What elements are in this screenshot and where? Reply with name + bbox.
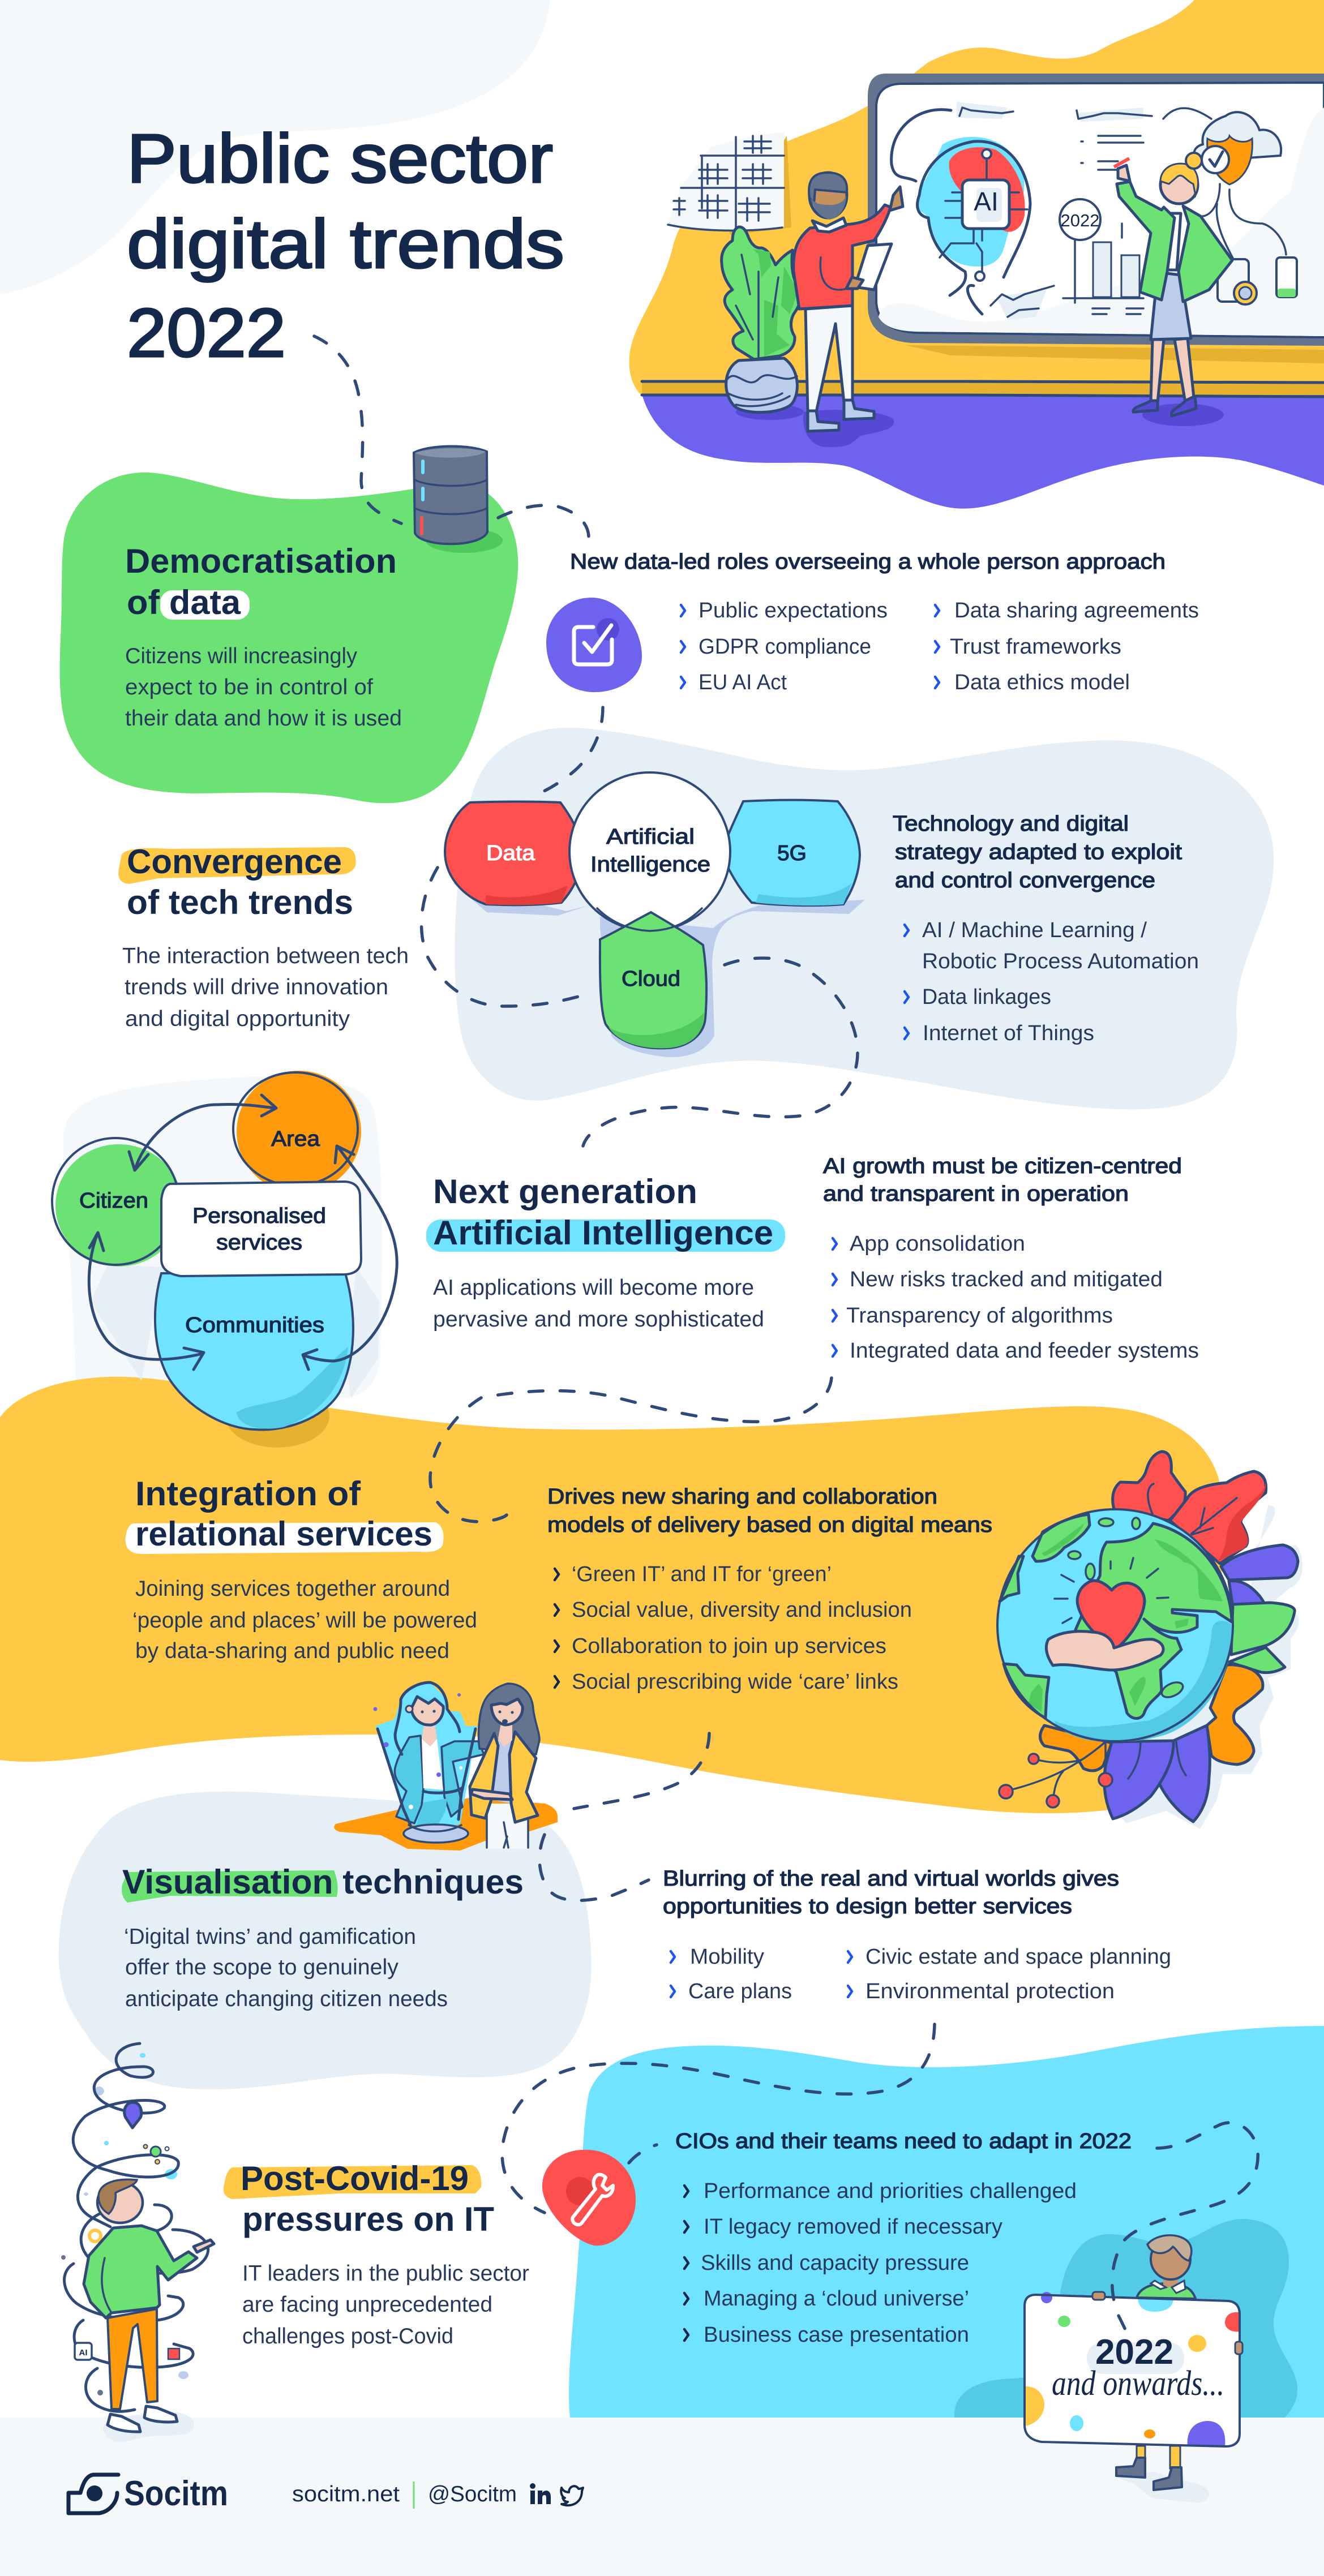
- node: communities: [155, 1273, 353, 1429]
- panel: personalised services blob: [63, 1076, 382, 1398]
- section: democratisation of data: [125, 542, 402, 731]
- man: [794, 173, 903, 431]
- section: new data-led roles: [546, 550, 1199, 694]
- heading: Convergence: [127, 843, 342, 881]
- background blob: hero floor: [642, 394, 1324, 509]
- diagram: AI head: [892, 110, 1030, 314]
- diagram: notes and arrows: [957, 102, 1211, 320]
- leaf: purple: [1221, 1545, 1298, 1580]
- legs: [1137, 2446, 1180, 2468]
- body text: ‘people and places’ will be powered: [132, 1608, 477, 1633]
- hands: [1092, 2292, 1242, 2354]
- section: blurring real and virtual: [663, 1867, 1171, 2003]
- footer: handle: @Socitm: [428, 2482, 517, 2506]
- section: next generation AI: [426, 1173, 785, 1332]
- body text: [242, 2261, 529, 2349]
- title: 2022: [127, 294, 286, 371]
- node: 5G: 5G: [777, 842, 807, 865]
- list: right column: Data ethics model: [954, 671, 1130, 694]
- trousers: [108, 2309, 157, 2409]
- node: artificial intelligence: Intelligence: [590, 853, 710, 877]
- body text: expect to be in control of: [125, 675, 373, 699]
- sign text: and onwards: and onwards...: [1052, 2364, 1224, 2403]
- list: right: Environmental protection: [865, 1980, 1115, 2003]
- subheading: AI growth must be citizen-centred: [823, 1154, 1182, 1178]
- label: 2022: 2022: [1061, 211, 1099, 230]
- node: 5G: [722, 800, 860, 905]
- body text: [125, 644, 402, 731]
- list: left: Mobility: [690, 1945, 764, 1969]
- node: personalised services: services: [216, 1231, 302, 1255]
- list: right: Civic estate and space planning: [865, 1945, 1171, 1969]
- skirting: [642, 381, 1324, 397]
- arrows: [89, 1095, 397, 1369]
- icon: AI chip: AI: [79, 2348, 87, 2358]
- footer panel: [0, 2418, 1324, 2576]
- icon: twitter: [561, 2486, 583, 2505]
- digital twin: [374, 1682, 484, 1843]
- highlight: convergence: [118, 847, 356, 884]
- subheading: strategy adapted to exploit: [895, 840, 1182, 864]
- highlight: relational services: [126, 1522, 444, 1554]
- heading line two: of tech trends: [127, 883, 353, 921]
- panel: post-covid darker blob: [954, 2219, 1297, 2418]
- list: Skills and capacity pressure: [701, 2251, 969, 2275]
- icon: wrench: [542, 2150, 636, 2246]
- node: area: [233, 1071, 361, 1193]
- shadow: [225, 1384, 329, 1448]
- section: integration of relational services: [126, 1475, 477, 1663]
- shoes: [108, 2406, 177, 2432]
- puddle: [334, 1798, 558, 1851]
- subheading: Technology and digital: [893, 812, 1129, 836]
- sign: [1023, 2292, 1241, 2446]
- body text: anticipate changing citizen needs: [125, 1987, 448, 2011]
- body text: trends will drive innovation: [125, 975, 388, 999]
- leaf: red back: [1113, 1452, 1185, 1521]
- background blob: top left: [0, 0, 550, 294]
- leaf: green: [1231, 1603, 1295, 1655]
- list: [905, 918, 1199, 1045]
- body text: [433, 1276, 764, 1332]
- title: [127, 120, 564, 371]
- section: drives new sharing: [547, 1485, 992, 1694]
- woman: [470, 1684, 539, 1849]
- list: Transparency of algorithms: [846, 1304, 1113, 1328]
- list: Robotic Process Automation: [922, 950, 1199, 973]
- list: [555, 1562, 912, 1694]
- body text: are facing unprecedented: [242, 2292, 492, 2317]
- body text: Citizens will increasingly: [125, 644, 357, 668]
- section: AI growth: [823, 1154, 1199, 1363]
- leaf shadows: [1109, 1505, 1302, 1829]
- list: New risks tracked and mitigated: [850, 1268, 1163, 1291]
- icon: database: [414, 446, 503, 553]
- node: data: Data: [486, 842, 535, 865]
- whiteboard: [868, 74, 1324, 363]
- list: left column: [681, 599, 888, 694]
- node: personalised services: Personalised: [192, 1204, 326, 1228]
- list: right column: Data sharing agreements: [954, 599, 1199, 622]
- illustration: man surrounded by spirals: [61, 2043, 214, 2442]
- dashed connector: final: [1112, 2123, 1258, 2334]
- floor shadows: [736, 403, 1224, 447]
- footer: divider: [413, 2481, 414, 2509]
- diagram: personalised services: [52, 1071, 397, 1448]
- list: left column: EU AI Act: [699, 671, 787, 694]
- subheading: Blurring of the real and virtual worlds gives: [663, 1867, 1119, 1891]
- list: left: Care plans: [688, 1980, 792, 2003]
- node: communities: Communities: [185, 1313, 324, 1337]
- pot: [726, 358, 797, 413]
- head: [97, 2179, 143, 2223]
- body text: challenges post-Covid: [242, 2324, 453, 2349]
- list: left column: GDPR compliance: [699, 635, 871, 659]
- subheading: New data-led roles overseeing a whole person approach: [570, 550, 1166, 574]
- list: Social prescribing wide ‘care’ links: [572, 1670, 898, 1694]
- list: AI / Machine Learning /: [922, 918, 1147, 942]
- footer: logo: Socitm: [124, 2474, 228, 2513]
- body text: pervasive and more sophisticated: [433, 1307, 764, 1332]
- section: post-covid pressures: [224, 2159, 529, 2349]
- shade: [91, 1265, 379, 1398]
- illustration: globe with heart and leaves: [997, 1452, 1302, 1829]
- title: Public sector: [127, 120, 553, 197]
- heart rays: [1055, 1558, 1168, 1623]
- node: personalised services: [161, 1182, 361, 1276]
- icon: AI chip: [75, 2343, 92, 2360]
- list: Collaboration to join up services: [572, 1634, 886, 1658]
- subheading: models of delivery based on digital means: [547, 1513, 992, 1537]
- plant: [722, 227, 801, 359]
- highlight: visualisation: [122, 1870, 338, 1903]
- sign text: 2022: 2022: [1095, 2333, 1173, 2372]
- body text: ‘Digital twins’ and gamification: [124, 1925, 416, 1949]
- heading: Post-Covid-19: [241, 2159, 469, 2197]
- body text: their data and how it is used: [125, 706, 402, 731]
- list: Performance and priorities challenged: [704, 2179, 1077, 2203]
- spirals: [65, 2043, 208, 2411]
- subheading: [547, 1485, 992, 1537]
- list: right column: Trust frameworks: [950, 635, 1121, 659]
- dots: [61, 2053, 188, 2395]
- body text: AI applications will become more: [433, 1276, 754, 1300]
- background blob: hero wall: [629, 0, 1324, 396]
- list: Integrated data and feeder systems: [850, 1339, 1199, 1363]
- sweater: [84, 2226, 197, 2318]
- list: right column: [935, 599, 1199, 694]
- body text: IT leaders in the public sector: [242, 2261, 529, 2286]
- hand: [1046, 1632, 1163, 1670]
- body text: [132, 1577, 477, 1663]
- section: CIOs adapt: [675, 2130, 1132, 2347]
- icon: heart: [1077, 1581, 1145, 1651]
- list: Data linkages: [922, 985, 1051, 1009]
- heading: Integration of: [135, 1475, 361, 1513]
- node: area: Area: [271, 1127, 320, 1151]
- heading line two: of data: [127, 583, 241, 621]
- list: App consolidation: [850, 1232, 1025, 1256]
- subheading: and control convergence: [895, 869, 1155, 892]
- body text: offer the scope to genuinely: [125, 1955, 399, 1980]
- panel: convergence blob: [455, 728, 1274, 1109]
- illustration: hero scene: [642, 74, 1324, 447]
- subheading: [823, 1154, 1182, 1206]
- body text: Joining services together around: [135, 1577, 450, 1601]
- list: [833, 1232, 1199, 1363]
- hand: [194, 2240, 214, 2252]
- subheading: opportunities to design better services: [663, 1895, 1072, 1918]
- highlight: post-covid: [224, 2165, 481, 2199]
- berries: [999, 1742, 1112, 1808]
- panel: post-covid blob: [569, 2026, 1324, 2418]
- woman: [1114, 153, 1232, 416]
- list: left column: Public expectations: [699, 599, 888, 622]
- icon: padlock: [168, 2349, 179, 2359]
- node: citizen: [52, 1138, 182, 1266]
- list: [684, 2179, 1077, 2347]
- heading line two: pressures on IT: [242, 2200, 494, 2238]
- subheading: [893, 812, 1182, 892]
- leaf: purple lower: [1159, 1725, 1210, 1822]
- calendar: [668, 132, 791, 235]
- node: artificial intelligence: Artificial: [606, 825, 695, 849]
- icon: linkedin: [530, 2483, 551, 2504]
- panel: visualisation blob: [59, 1792, 592, 2089]
- dashed connectors: [314, 336, 935, 2213]
- body text: [124, 1925, 448, 2011]
- heading: Visualisation techniques: [122, 1863, 524, 1901]
- title: digital trends: [127, 205, 564, 282]
- icon: pin: [125, 2102, 142, 2128]
- list: Social value, diversity and inclusion: [572, 1598, 912, 1622]
- panel: democratisation blob: [60, 473, 518, 803]
- body text: and digital opportunity: [125, 1007, 350, 1031]
- head: [1147, 2235, 1192, 2293]
- section: convergence of tech trends: [118, 843, 409, 1031]
- icon: virus: [144, 2145, 169, 2164]
- icon: gear: [89, 2230, 101, 2242]
- highlight: AI: [426, 1220, 785, 1252]
- torso: [1137, 2283, 1196, 2299]
- shadows: [453, 883, 865, 1057]
- shadow: [103, 2412, 194, 2442]
- body text: [122, 944, 409, 1031]
- list: Managing a ‘cloud universe’: [704, 2287, 969, 2311]
- footer: website: socitm.net: [292, 2482, 400, 2506]
- boots: [1116, 2458, 1182, 2490]
- label: AI: AI: [974, 187, 999, 216]
- list: Internet of Things: [923, 1021, 1094, 1045]
- body text: by data-sharing and public need: [135, 1639, 449, 1663]
- list: Business case presentation: [704, 2323, 969, 2347]
- node: cloud: Cloud: [622, 967, 680, 991]
- islands: [1068, 1518, 1185, 1700]
- list: ‘Green IT’ and IT for ‘green’: [572, 1562, 832, 1586]
- node: data: [445, 801, 582, 905]
- panel: integration band: [0, 1377, 1223, 1813]
- node: cloud: [597, 908, 706, 1048]
- body text: The interaction between tech: [122, 944, 409, 968]
- icon: checkbox: [546, 598, 642, 692]
- globe: [997, 1509, 1233, 1742]
- shadow: [1114, 2472, 1209, 2502]
- illustration: two women with digital twin: [334, 1682, 558, 1851]
- node: artificial intelligence: [569, 772, 730, 931]
- footer: logo: [68, 2474, 228, 2513]
- section: technology and digital strategy: [893, 812, 1199, 1045]
- diagram: technology convergence: [445, 772, 865, 1057]
- list: right: [848, 1945, 1171, 2003]
- list: IT legacy removed if necessary: [704, 2215, 1002, 2239]
- heading line two: Artificial Intelligence: [433, 1214, 773, 1252]
- leaf: red front: [1170, 1471, 1266, 1564]
- subheading: CIOs and their teams need to adapt in 2022: [675, 2130, 1132, 2153]
- illustration: person holding sign: [1023, 2235, 1242, 2502]
- heading: Next generation: [433, 1173, 697, 1210]
- subheading: and transparent in operation: [823, 1182, 1129, 1206]
- node: citizen: Citizen: [79, 1189, 148, 1213]
- subheading: Drives new sharing and collaboration: [547, 1485, 937, 1509]
- highlight: data: [160, 590, 250, 620]
- leaf: orange: [1207, 1665, 1263, 1764]
- list: left: [671, 1945, 792, 2003]
- heading: Democratisation: [125, 542, 397, 580]
- section: visualisation techniques: [122, 1863, 524, 2011]
- diagram: shield, cloud, lock and phone: [1194, 112, 1297, 304]
- subheading: [663, 1867, 1119, 1918]
- heading line two: relational services: [135, 1515, 432, 1553]
